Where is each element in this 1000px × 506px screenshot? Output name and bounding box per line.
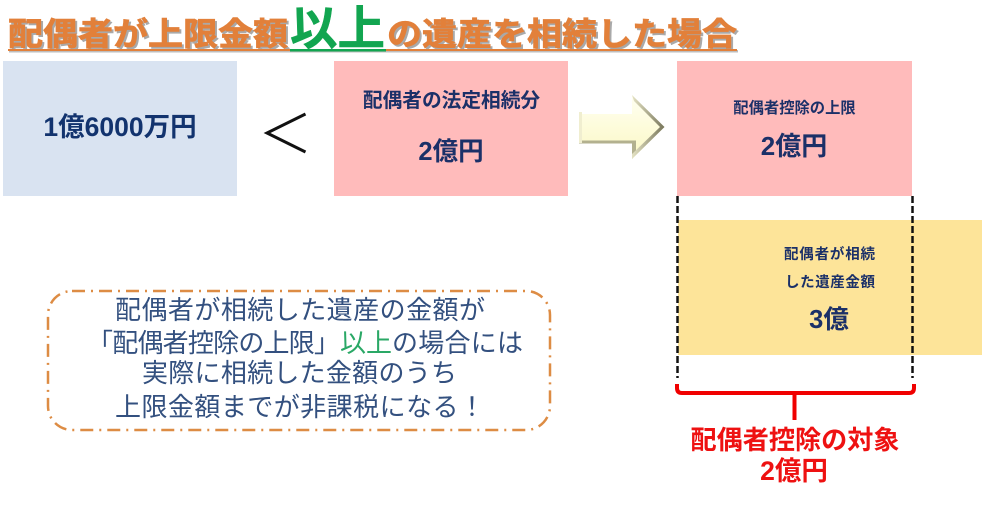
callout: の場合には xyxy=(392,328,523,358)
title: 以上 xyxy=(290,2,385,55)
callout: 実際に相続した金額のうち xyxy=(142,358,457,388)
label: 配偶者控除の対象 2億円: 配偶者控除の対象 xyxy=(690,425,900,455)
label: 配偶者控除の対象 2億円: 2億円 xyxy=(760,456,828,486)
red bracket xyxy=(677,384,914,420)
callout: 配偶者が相続した遺産の金額が xyxy=(115,295,485,325)
title: 配偶者が上限金額 xyxy=(10,18,290,54)
title: の遺産を相続した場合 xyxy=(387,16,737,52)
panel: 配偶者控除の上限 xyxy=(677,61,912,196)
panel: 配偶者が相続した遺産金額 xyxy=(678,220,982,355)
panel: 1億6000万円: 1億6000万円 xyxy=(43,112,197,142)
less-than sign xyxy=(267,114,306,152)
panel: 配偶者が相続した遺産金額: 3億 xyxy=(809,306,849,334)
panel: 配偶者の法定相続分: 配偶者の法定相続分 xyxy=(363,90,540,112)
panel: 1億6000万円 xyxy=(3,61,237,196)
callout: 「配偶者控除の上限」 xyxy=(87,328,340,358)
title: の遺産を相続した場合 xyxy=(389,18,739,54)
callout xyxy=(48,291,550,430)
label: 配偶者控除の対象 2億円 xyxy=(690,425,900,486)
panel: 配偶者が相続した遺産金額: 配偶者が相続 xyxy=(784,245,876,263)
panel: 配偶者控除の上限: 配偶者控除の上限 xyxy=(733,100,856,117)
dashed guide lines xyxy=(678,196,912,378)
panel: 配偶者の法定相続分: 2億円 xyxy=(418,138,484,166)
title xyxy=(8,2,739,55)
panel: 配偶者が相続した遺産金額: した遺産金額 xyxy=(785,273,876,291)
panel: 配偶者控除の上限: 2億円 xyxy=(761,131,827,161)
arrow xyxy=(579,95,664,159)
title: 配偶者が上限金額 xyxy=(8,16,288,52)
callout: 上限金額までが非課税になる！ xyxy=(115,392,485,422)
callout: 以上 xyxy=(340,328,392,358)
panel: 配偶者の法定相続分 xyxy=(334,61,568,196)
